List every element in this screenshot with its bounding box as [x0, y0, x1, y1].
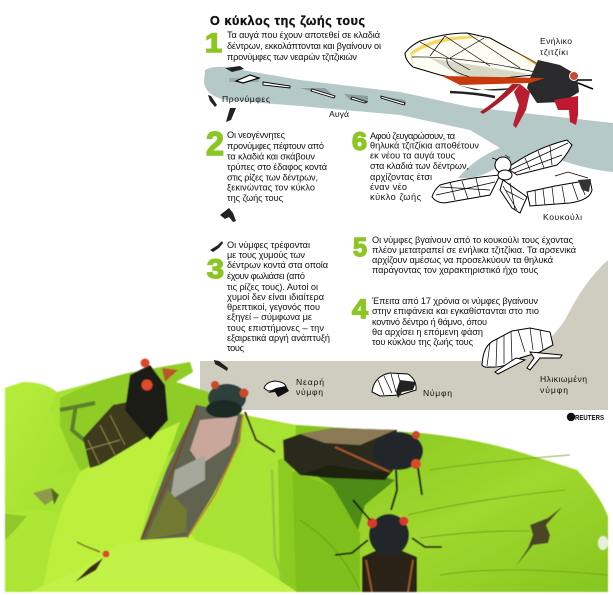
title: Ο κύκλος της ζωής τους [210, 14, 365, 28]
line art: mature nymph [482, 328, 587, 395]
label: mature nymph: Ηλικιωμένη [540, 374, 587, 384]
cocoon shell [527, 180, 592, 206]
step 3 text: Οι νύμφες τρέφονται [227, 240, 310, 250]
base of foliage [5, 362, 608, 592]
legs [480, 84, 520, 114]
step 6 text: θηλυκά τζιτζίκια αποθέτουν [370, 140, 479, 150]
step 4 text: του κύκλου της ζωής τους [372, 337, 474, 347]
left wing [432, 175, 500, 203]
body [527, 60, 579, 103]
icon: larva [208, 95, 236, 122]
step 1 text: Τα αυγά που έχουν αποτεθεί σε κλαδιά [227, 30, 381, 40]
icon: small nymph [214, 360, 228, 371]
step 6 text: κύκλο ζωής [370, 192, 422, 202]
icon: feeding larva [210, 241, 223, 252]
wing [405, 33, 540, 80]
step 6 text: εκ νέου τα αυγά τους [370, 150, 456, 160]
cicada: right [283, 428, 423, 510]
step 6 text: στα κλαδιά των δέντρων, [370, 161, 469, 171]
step 4 text: κοντινό δέντρο ή θάμνο, όπου [372, 317, 487, 327]
step 2 text: της ζωής τους [227, 193, 284, 203]
step 3 text: τους επιστήμονες – την [227, 323, 324, 333]
step 1 text: προνύμφες των νεαρών τζιτζικιών [227, 52, 357, 62]
label: mature nymph: νύμφη [540, 385, 568, 395]
step 1 text: δέντρων, εκκολάπτονται και βγαίνουν οι [227, 41, 381, 51]
label: adult [540, 36, 572, 57]
step 2 text: τα κλαδιά και σκάβουν [227, 152, 315, 162]
step 5 [353, 232, 577, 275]
cicada: bottom [335, 500, 442, 592]
cicada: upper left [83, 358, 178, 468]
line art: cicada leaving cocoon [432, 140, 592, 222]
head and thorax [495, 157, 511, 173]
step 2 text: Οι νεογέννητες [227, 130, 286, 140]
label: eggs: Αυγά [329, 109, 349, 119]
icon: burrowing larva [220, 208, 236, 222]
step 5 text: παράγοντας τον χαρακτηριστικό ήχο τους [372, 265, 539, 275]
label: larvae: Προνύμφες [222, 94, 270, 104]
step 3 text: χυμοί δεν είναι ιδιαίτερα [227, 292, 325, 302]
step 4 text: στην επιφάνεια και εγκαθίστανται στο πιο [372, 306, 539, 316]
leaf hole [516, 507, 562, 566]
step 6 [352, 128, 479, 202]
label: young nymph: νύμφη [296, 387, 323, 397]
step 5 text [372, 235, 577, 275]
step 3 text: τις ρίζες τους). Αυτοί οι [227, 282, 318, 292]
adult cicada [405, 33, 593, 128]
label: young nymph: Νεαρή [296, 377, 324, 387]
lower-left leaf [5, 510, 70, 592]
step 3 text: δέντρων κοντά στα οποία [227, 260, 329, 270]
label: adult: τζιτζίκι [540, 47, 568, 57]
credit: Reuters [567, 413, 604, 422]
leaf veins [300, 455, 608, 590]
step 3 text: τους [227, 343, 245, 353]
step 3 [207, 240, 330, 353]
branch background [204, 67, 613, 178]
step 4 text: θα αρχίσει η επόμενη φάση [372, 327, 483, 337]
step 1 text [227, 30, 381, 62]
step 4 text: Έπειτα από 17 χρόνια οι νύμφες βγαίνουν [371, 296, 538, 306]
step 3 text: εξαιρετικά αργή ανάπτυξή [227, 333, 330, 343]
step 4 [352, 294, 539, 347]
label: cocoon: Κουκούλι [543, 212, 582, 222]
right wing [507, 140, 572, 175]
step 3 text: έχουν φωλιάσει (από [227, 271, 305, 281]
stems [60, 403, 95, 445]
step 3 text: θρεπτικοί, γεγονός που [227, 302, 320, 312]
eye [570, 72, 578, 80]
credit: Reuters: REUTERS [575, 413, 604, 422]
step 2 text: τρύπες στο έδαφος κοντά [227, 162, 328, 172]
cicada: small lower [75, 542, 110, 582]
label: young nymph [296, 377, 324, 397]
step 2 text: ξεκινώντας τον κύκλο [227, 182, 315, 192]
number 5: 5 [353, 232, 367, 262]
eggs on branch [225, 66, 406, 105]
step 6 text [370, 131, 479, 202]
step 6 text: Αφού ζευγαρώσουν, τα [370, 131, 456, 141]
step 2 text: προνύμφες πέφτουν από [227, 141, 324, 151]
step 2 text [227, 130, 328, 203]
cicada: center [140, 381, 275, 540]
right leaf [290, 425, 608, 592]
left leaf [5, 382, 77, 510]
step 2 text: στις ρίζες των δέντρων, [227, 172, 318, 182]
step 6 text: αρχίζοντας έτσι [370, 172, 432, 182]
bottom leaf [30, 538, 297, 592]
leaf shadow [296, 462, 395, 530]
number 3: 3 [207, 254, 224, 284]
step 3 text: εξηγεί – σύμφωνα με [227, 312, 312, 322]
step 2 [206, 125, 328, 222]
hind wing [500, 180, 527, 213]
step 3 text [227, 240, 330, 353]
right-center leaf [200, 418, 280, 572]
step 5 text: αρχίζουν αμέσως να προσελκύουν τα θηλυκά [372, 255, 554, 265]
line art: nymph [372, 373, 452, 398]
label: nymph: Νύμφη [423, 388, 452, 398]
step 4 text [371, 296, 539, 347]
number 1: 1 [205, 28, 222, 58]
ground background [200, 260, 608, 410]
number 6: 6 [352, 128, 367, 156]
back leaf [60, 362, 215, 470]
label: mature nymph [540, 374, 587, 395]
step 3 text: με τους χυμούς των [227, 250, 305, 260]
number 2: 2 [206, 125, 224, 162]
photo: cicadas on leaves [5, 358, 608, 592]
central big leaf [43, 422, 200, 590]
step 6 text: έναν νέο [370, 182, 407, 192]
label: adult: Ενήλικο [540, 36, 572, 46]
step 5 text: Οι νύμφες βγαίνουν από το κουκούλι τους έχοντας [372, 235, 574, 245]
number 4: 4 [352, 294, 368, 324]
line art: young nymph [264, 377, 324, 397]
step 1 [205, 28, 381, 62]
step 5 text: πλέον μετατραπεί σε ενήλικα τζιτζίκια. Τα αρσενικά [372, 245, 577, 255]
